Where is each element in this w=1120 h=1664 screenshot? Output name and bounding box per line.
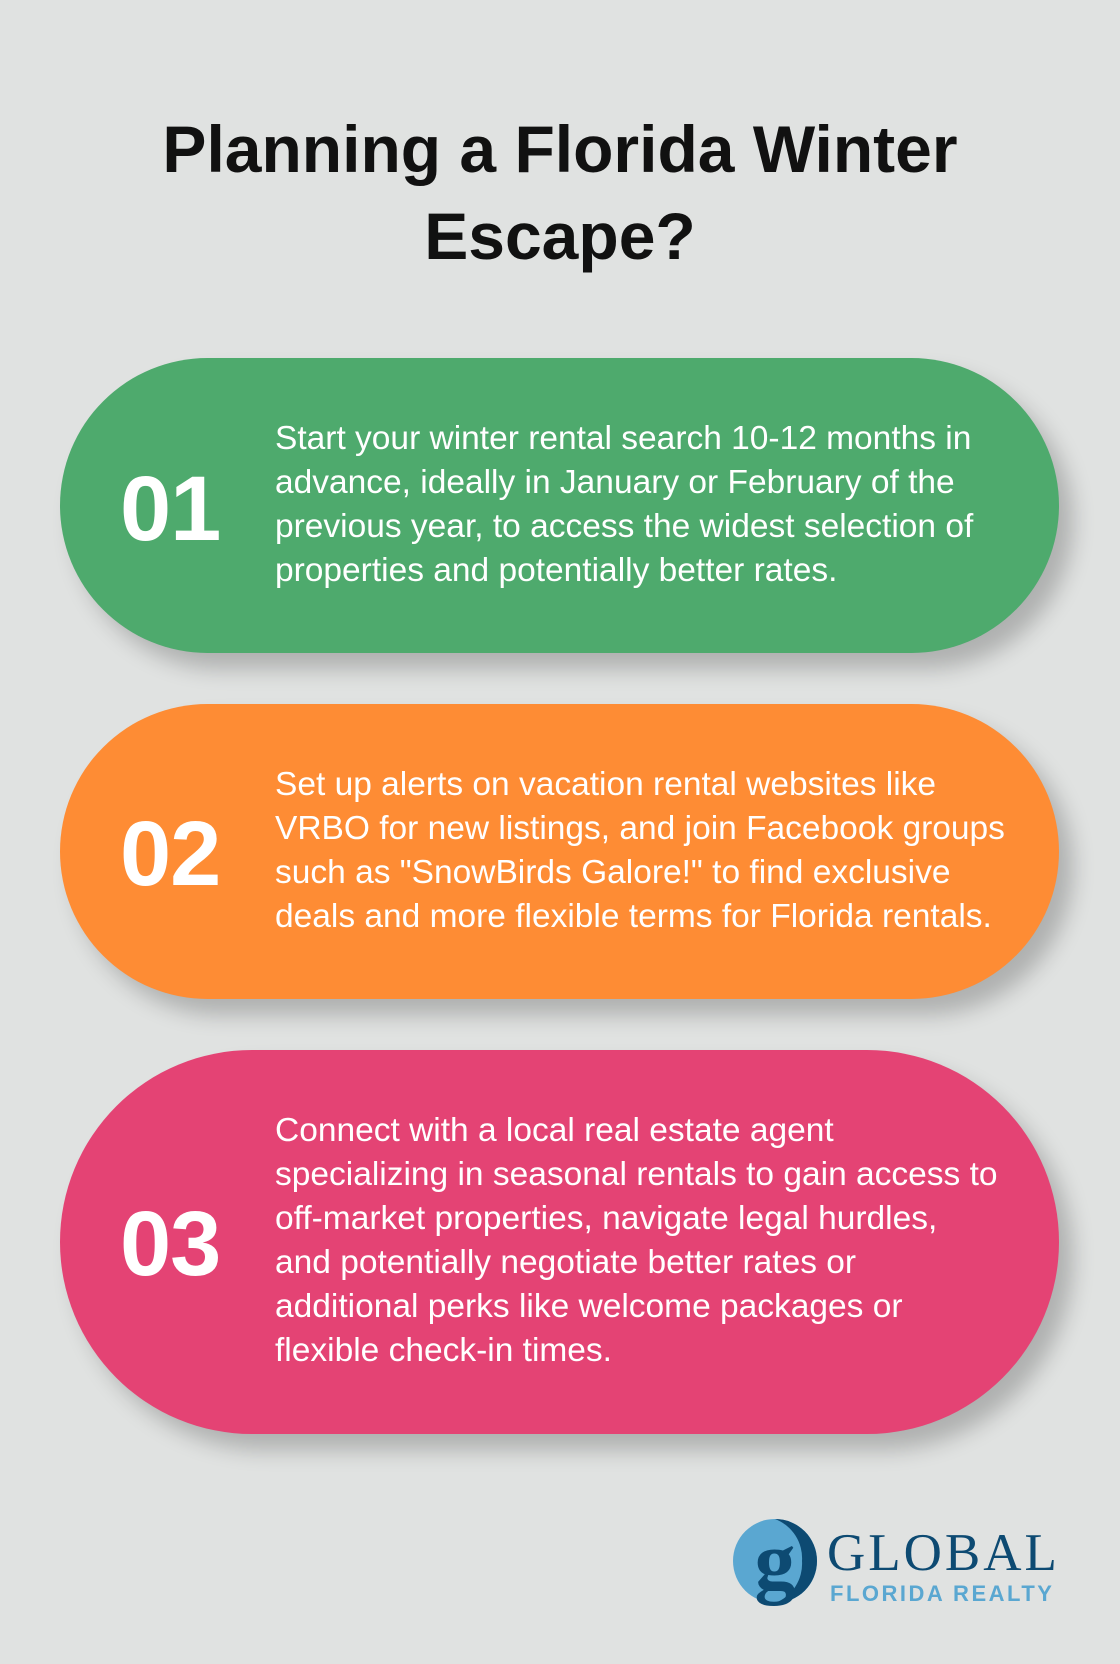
text 01: advance, ideally in January or February of the bbox=[275, 464, 955, 501]
text 01: previous year, to access the widest selection of bbox=[275, 508, 973, 545]
title: Planning a Florida Winter bbox=[162, 112, 958, 186]
number 01: 01 bbox=[120, 458, 220, 560]
text 03: and potentially negotiate better rates or bbox=[275, 1244, 856, 1281]
text 01: properties and potentially better rates. bbox=[275, 552, 837, 589]
panel: step 03 bbox=[60, 1050, 1059, 1434]
icon: g circle bbox=[733, 1518, 817, 1606]
text 03: off-market properties, navigate legal hurdles, bbox=[275, 1200, 937, 1237]
text 03: flexible check-in times. bbox=[275, 1332, 612, 1369]
text 02: deals and more flexible terms for Florida rentals. bbox=[275, 898, 992, 935]
text 03: specializing in seasonal rentals to gain access to bbox=[275, 1156, 998, 1193]
text 02: VRBO for new listings, and join Facebook groups bbox=[275, 810, 1005, 847]
text 02: such as "SnowBirds Galore!" to find exclusive bbox=[275, 854, 950, 891]
panel: step 01 bbox=[60, 358, 1059, 653]
text 03 bbox=[275, 1112, 998, 1369]
number 02: 02 bbox=[120, 803, 220, 905]
logo text: GLOBAL bbox=[827, 1524, 1060, 1582]
text 01: Start your winter rental search 10-12 months in bbox=[275, 420, 971, 457]
text 03: additional perks like welcome packages or bbox=[275, 1288, 903, 1325]
logo bbox=[733, 1518, 1060, 1606]
title bbox=[162, 112, 958, 273]
text 02: Set up alerts on vacation rental websites like bbox=[275, 766, 936, 803]
logo: FLORIDA REALTY bbox=[830, 1581, 1054, 1606]
panel: step 02 bbox=[60, 704, 1059, 999]
text 03: Connect with a local real estate agent bbox=[275, 1112, 834, 1149]
title: Escape? bbox=[424, 199, 696, 273]
text 01 bbox=[275, 420, 974, 589]
text 02 bbox=[275, 766, 1005, 935]
number 03: 03 bbox=[120, 1193, 220, 1295]
